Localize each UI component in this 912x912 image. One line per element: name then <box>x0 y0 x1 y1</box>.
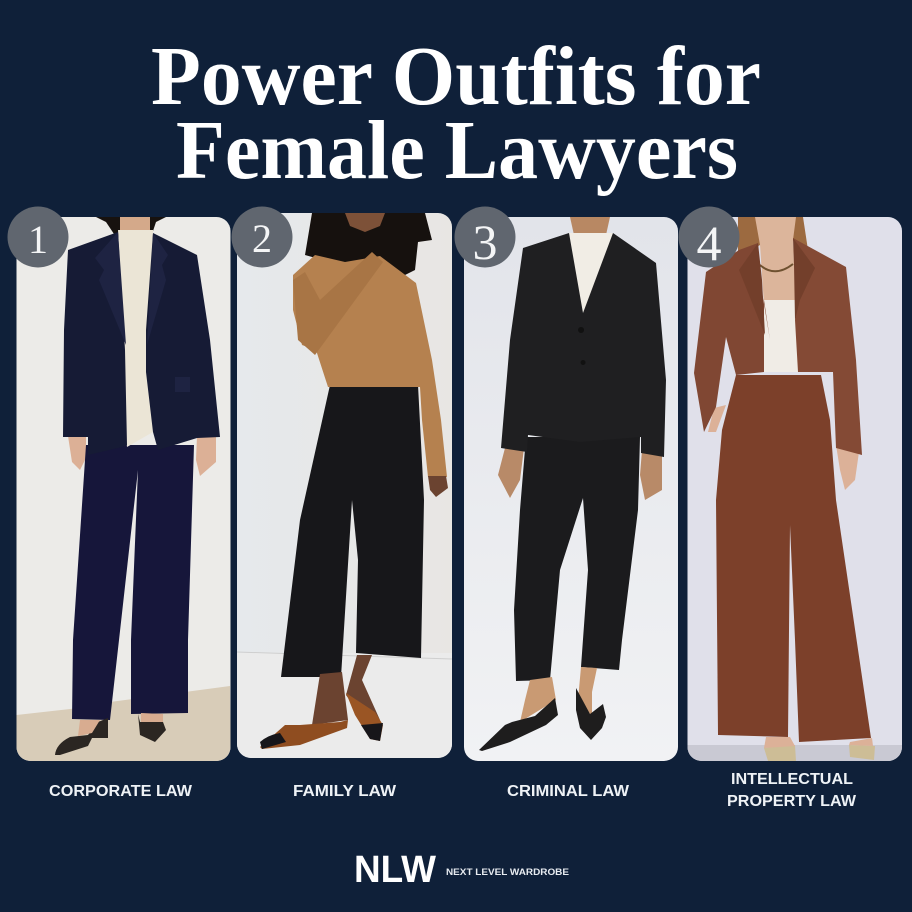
number badge 1: 1 <box>28 217 48 262</box>
hands <box>498 448 662 500</box>
shirt <box>118 230 153 447</box>
number badge 2 <box>232 206 292 268</box>
number badge 4 <box>678 206 740 271</box>
shoes <box>764 745 875 761</box>
trousers <box>281 385 424 677</box>
trousers <box>72 445 194 720</box>
logo: NLW Next Level Wardrobe: NLW <box>354 849 436 891</box>
sweater <box>293 255 447 477</box>
blazer right side <box>146 233 220 450</box>
top <box>764 300 799 372</box>
hands <box>68 436 216 476</box>
title: Power Outfits for <box>151 30 761 123</box>
trousers <box>514 437 640 681</box>
hand <box>428 476 448 497</box>
legs <box>312 655 380 725</box>
number badge 1 <box>8 206 68 268</box>
lapels and pocket <box>95 232 190 392</box>
blazer left side <box>63 232 127 455</box>
label: intellectual property law: PROPERTY LAW <box>727 793 856 810</box>
logo: NLW Next Level Wardrobe: NEXT LEVEL WARDROBE <box>446 867 569 877</box>
blazer <box>694 243 770 432</box>
label: intellectual property law: INTELLECTUAL <box>731 771 853 788</box>
blazer <box>501 233 666 457</box>
shirt <box>569 233 613 313</box>
panel: outfit 4 intellectual property law photo <box>688 217 902 761</box>
hair <box>738 217 808 251</box>
necklace <box>760 264 793 271</box>
title <box>151 30 761 197</box>
blazer buttons <box>578 327 586 365</box>
label: criminal law: CRIMINAL LAW <box>507 783 629 800</box>
number badge 2: 2 <box>252 216 272 261</box>
shoes <box>55 718 108 755</box>
label: corporate law: CORPORATE LAW <box>49 783 192 800</box>
panel: outfit 3 criminal law photo <box>464 217 678 761</box>
trousers <box>716 375 871 742</box>
number badge 3 <box>454 206 516 270</box>
logo: NLW Next Level Wardrobe <box>354 849 569 891</box>
legs <box>520 667 597 722</box>
label: intellectual property law <box>727 771 856 810</box>
panel: outfit 1 corporate law photo <box>16 217 231 761</box>
hand <box>708 405 860 490</box>
shoes <box>260 720 348 749</box>
number badge 4: 4 <box>696 215 722 271</box>
title: Female Lawyers <box>176 104 738 197</box>
label: family law: FAMILY LAW <box>293 783 396 800</box>
number badge 3: 3 <box>472 214 498 270</box>
panel: outfit 2 family law photo <box>237 213 452 758</box>
shoes <box>479 698 558 751</box>
hair <box>305 213 432 280</box>
